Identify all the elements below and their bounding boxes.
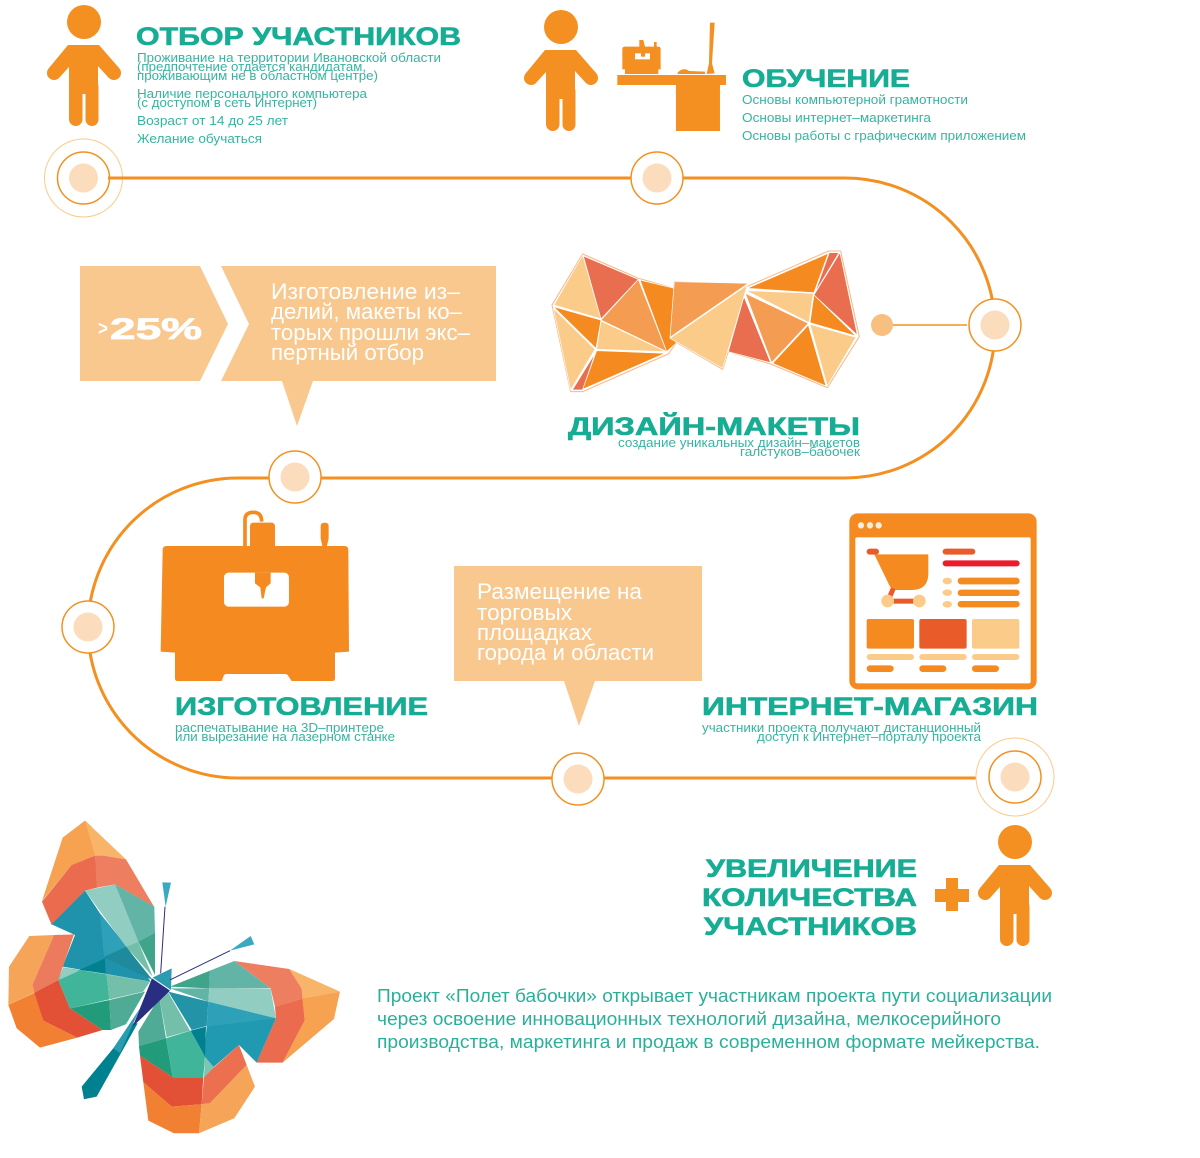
text: manufacturing description: или вырезание на лазерном станке (175, 729, 395, 744)
text: selection criteria: (предпочтение отдается кандидатам, (137, 59, 366, 74)
heading: design layouts: ДИЗАЙН-МАКЕТЫ (568, 411, 860, 441)
illustration: butterfly (8, 821, 340, 1133)
icon: bow tie (552, 251, 859, 392)
node 2 (631, 152, 683, 204)
text: manufacturing description (175, 720, 395, 744)
callout: marketplaces: площадках (477, 620, 592, 645)
callout: manufacturing products: Изготовление из– (271, 279, 461, 304)
text: design description: создание уникальных дизайн–макетов (618, 435, 860, 450)
text: training topics: Основы работы с графическим приложением (742, 128, 1026, 143)
icon: plus (935, 878, 969, 911)
node 6 (552, 753, 604, 805)
callout: marketplaces: города и области (477, 640, 654, 665)
node 1 (44, 139, 125, 217)
banner: share 25%: > (98, 318, 108, 340)
heading: manufacturing: ИЗГОТОВЛЕНИЕ (175, 693, 428, 721)
text: selection criteria: проживающим не в областном центре) (137, 68, 378, 83)
text: selection criteria: Желание обучаться (137, 131, 262, 146)
banner: share 25%: 25% (110, 313, 202, 346)
heading: online shop: ИНТЕРНЕТ-МАГАЗИН (702, 693, 1038, 721)
icon: online shop window (849, 513, 1037, 689)
heading: more participants (702, 855, 917, 941)
text: online shop description: доступ к Интернет–порталу проекта (757, 729, 982, 744)
callout: manufacturing products (221, 266, 496, 426)
icon: desk with machine (617, 23, 726, 131)
callout: marketplaces (454, 566, 702, 726)
text: project summary: Проект «Полет бабочки» открывает участникам проекта пути социализации (377, 986, 1052, 1006)
icon: person 1 (49, 5, 119, 126)
heading: training: ОБУЧЕНИЕ (742, 65, 910, 93)
text: selection criteria (137, 50, 441, 146)
icon: person 3 (980, 825, 1050, 946)
text: project summary (377, 986, 1052, 1052)
text: project summary: производства, маркетинга и продаж в современном формате мейкерства. (377, 1032, 1040, 1052)
callout: manufacturing products: делий, макеты ко– (271, 299, 463, 324)
text: online shop description: участники проекта получают дистанционный (702, 720, 981, 735)
text: training topics: Основы компьютерной грамотности (742, 92, 968, 107)
node 3 (969, 299, 1021, 351)
text: selection criteria: (с доступом в сеть Интернет) (137, 95, 317, 110)
heading: selection: ОТБОР УЧАСТНИКОВ (136, 23, 461, 51)
text: selection criteria: Проживание на территории Ивановской области (137, 50, 441, 65)
icon: CNC machine (161, 512, 349, 681)
text: project summary: через освоение инновационных технологий дизайна, мелкосерийного (377, 1009, 1001, 1029)
heading: more participants: УВЕЛИЧЕНИЕ (706, 855, 917, 883)
text: online shop description (702, 720, 982, 744)
callout: manufacturing products: торых прошли экс– (271, 320, 471, 345)
node 7 (976, 738, 1054, 816)
text: design description: галстуков–бабочек (740, 444, 860, 459)
banner: share 25% (80, 266, 228, 381)
timeline path (88, 178, 1000, 778)
heading: more participants: КОЛИЧЕСТВА (702, 884, 917, 912)
text: training topics: Основы интернет–маркетинга (742, 110, 932, 125)
timeline nodes (44, 139, 1054, 816)
text: selection criteria: Наличие персонального компьютера (137, 86, 368, 101)
text: design description (618, 435, 860, 459)
heading: more participants: УЧАСТНИКОВ (704, 913, 917, 941)
node 5 (62, 601, 114, 653)
node 4 (269, 451, 321, 503)
connector dot (871, 314, 967, 336)
callout: marketplaces: торговых (477, 600, 572, 625)
icon: person 2 (526, 10, 596, 131)
text: manufacturing description: распечатывание на 3D–принтере (175, 720, 384, 735)
callout: manufacturing products: пертный отбор (271, 340, 424, 365)
callout: marketplaces: Размещение на (477, 579, 643, 604)
text: training topics (742, 92, 1026, 143)
text: selection criteria: Возраст от 14 до 25 лет (137, 113, 288, 128)
